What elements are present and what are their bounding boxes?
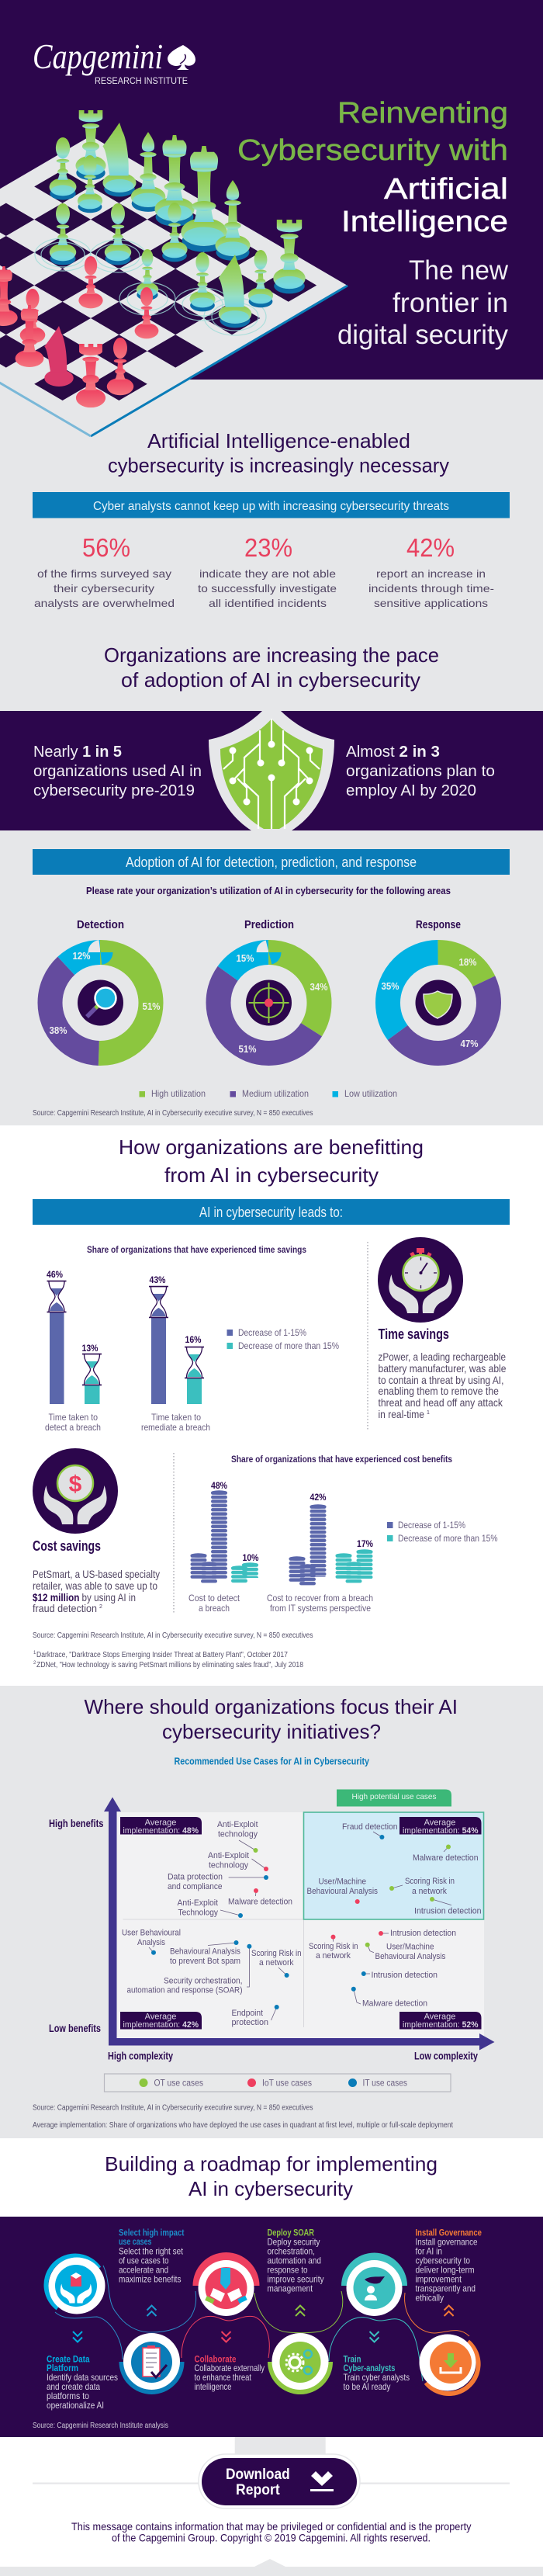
heading: pace of adoption: Organizations are increasing the pace — [104, 643, 439, 667]
source and note: Source: Capgemini Research Institute, AI in Cybersecurity executive survey, N = 850 executives — [33, 2103, 313, 2113]
text: collaborate: intelligence — [194, 2381, 232, 2392]
title: frontier in — [393, 288, 508, 318]
text: collaborate: to enhance threat — [194, 2372, 252, 2383]
tag: high potential use cases — [337, 1790, 451, 1807]
source and footnotes: Darktrace, "Darktrace Stops Emerging Insider Threat at Battery Plant", October 2017 — [36, 1651, 288, 1659]
legend: use cases: OT use cases — [154, 2077, 203, 2088]
text: create data platform — [47, 2353, 118, 2411]
axis: benefits — [104, 1798, 121, 2046]
donut: response: 18% — [459, 956, 477, 968]
source: Source: Capgemini Research Institute analysis — [33, 2422, 168, 2430]
source and footnotes — [33, 1631, 313, 1669]
stat: 42%: sensitive applications — [374, 597, 488, 609]
point labels: Endpoint — [231, 2009, 263, 2018]
donut: response: 35% — [382, 980, 399, 992]
text: create data platform: platforms to — [47, 2391, 89, 2401]
point labels: Analysis — [137, 1938, 165, 1947]
chart: cost savings: 42% — [310, 1492, 327, 1503]
case study: cost savings: 2 — [99, 1604, 102, 1610]
green chess pieces, back rows — [50, 110, 306, 311]
button: download report — [199, 2454, 360, 2508]
point labels: and compliance — [168, 1882, 222, 1891]
chart: time savings — [45, 1244, 339, 1433]
text: install governance: improvement — [416, 2274, 462, 2285]
blue bar: leads to — [33, 1199, 510, 1225]
chart: cost savings: Cost to detect — [188, 1593, 240, 1603]
donut: response: Response — [416, 918, 461, 931]
axis labels: Low benefits — [49, 2023, 101, 2034]
point labels: Malware detection — [228, 1897, 292, 1906]
heading: benefitting — [119, 1135, 424, 1187]
point labels: Scoring Risk in — [405, 1877, 455, 1886]
source and note — [33, 2103, 453, 2130]
text: select high impact use cases — [119, 2228, 185, 2285]
text: deploy soar: Deploy SOAR — [267, 2228, 314, 2238]
donut: prediction — [219, 918, 328, 1055]
text: 1 in 5: cybersecurity pre-2019 — [33, 782, 195, 799]
text: 2 in 3: Almost 2 in 3 — [346, 744, 440, 761]
point labels: Technology — [178, 1908, 218, 1917]
text: create data platform: Create Data — [47, 2353, 90, 2364]
text: create data platform: Platform — [47, 2363, 78, 2373]
step: install governance icon — [407, 2322, 490, 2406]
text: train cyber-analysts: Train cyber analysts — [343, 2372, 410, 2383]
donut: detection: 38% — [50, 1025, 67, 1036]
heading: increasingly necessary: cybersecurity is increasingly necessary — [108, 453, 449, 477]
stat: 56%: their cybersecurity — [54, 582, 154, 595]
text: deploy soar: automation and — [267, 2255, 321, 2266]
case study: cost savings: retailer, was able to save up to — [33, 1579, 157, 1592]
panel: footer — [0, 2437, 543, 2567]
point labels: Security orchestration, — [164, 1976, 242, 1985]
donut: prediction: 34% — [310, 981, 328, 993]
panel: roadmap heading: AI in cybersecurity — [188, 2177, 353, 2200]
step: deploy soar icon — [268, 2333, 333, 2394]
text: 1 in 5 — [33, 744, 202, 799]
point labels: technology — [209, 1861, 248, 1870]
text: deploy soar: response to — [267, 2265, 308, 2276]
point labels: Anti-Exploit — [177, 1898, 218, 1908]
blue bar: cyber analysts: Cyber analysts cannot keep up with increasing cybersecurity threats — [93, 500, 449, 513]
data points: red IoT — [254, 1867, 383, 1940]
point labels: technology — [218, 1830, 258, 1839]
legend: use cases: IoT use cases — [262, 2077, 312, 2088]
text: select high impact use cases: of use cases to — [119, 2255, 169, 2266]
point labels: User/Machine — [386, 1942, 434, 1951]
blue bar: leads to: AI in cybersecurity leads to: — [199, 1205, 343, 1220]
data points: blue IT — [151, 1835, 384, 2009]
point labels: Fraud detection — [342, 1822, 397, 1832]
panel: roadmap heading: Building a roadmap for implementing — [105, 2152, 438, 2176]
blue bar: adoption — [33, 849, 510, 875]
badge: 52%: Average — [424, 2012, 455, 2021]
badge: 48%: implementation: 48% — [123, 1826, 199, 1836]
point labels: Intrusion detection — [371, 1971, 438, 1980]
text: collaborate — [194, 2353, 265, 2392]
text: select high impact use cases: maximize benefits — [119, 2274, 182, 2285]
point labels: Data protection — [168, 1872, 223, 1881]
text: train cyber-analysts: Train — [343, 2353, 361, 2364]
axis labels — [49, 1818, 478, 2061]
stat: 42%: 42% — [406, 533, 455, 562]
source and footnotes: 1 — [33, 1651, 36, 1656]
text: train cyber-analysts: to be AI ready — [343, 2381, 391, 2392]
heading: benefitting: How organizations are benefitting — [119, 1135, 424, 1159]
stat: 56%: of the firms surveyed say — [37, 567, 171, 580]
icon: magnifier — [87, 987, 116, 1017]
heading: pace of adoption: of adoption of AI in cybersecurity — [121, 668, 420, 692]
text: 1 in 5: Nearly 1 in 5 — [33, 744, 122, 761]
case study: cost savings: $12 million by using AI in — [33, 1591, 136, 1603]
chart: time savings: 43% — [149, 1274, 166, 1285]
heading: benefitting: from AI in cybersecurity — [164, 1163, 379, 1187]
point labels: User/Machine — [318, 1877, 366, 1886]
chart: cost savings: 10% — [242, 1552, 259, 1563]
axis labels: High complexity — [108, 2051, 173, 2061]
badge: 52%: implementation: 52% — [403, 2020, 479, 2030]
tag: high potential use cases: High potential use cases — [352, 1792, 436, 1801]
text: install governance: Install Governance — [416, 2228, 482, 2238]
text: deploy soar: management — [267, 2283, 313, 2294]
case study: time savings: zPower, a leading rechargeable — [379, 1350, 506, 1363]
heading: where to focus: cybersecurity initiatives? — [162, 1720, 381, 1743]
text: train cyber-analysts — [343, 2353, 410, 2392]
badge: 54% — [399, 1817, 481, 1836]
icon: circuit shield — [209, 711, 334, 830]
point labels: Malware detection — [413, 1853, 478, 1863]
icon: target — [248, 983, 289, 1023]
quadrant: high potential — [304, 1812, 484, 1919]
chart: time savings: Decrease of 1-15% — [238, 1327, 306, 1338]
case study: time savings — [379, 1326, 507, 1420]
logo: Capgemini — [33, 36, 163, 76]
source: Source: Capgemini Research Institute, AI in Cybersecurity executive survey, N = 850 executives — [33, 1109, 313, 1118]
text: install governance: transparently and — [416, 2283, 476, 2294]
badge: 54%: implementation: 54% — [403, 1826, 479, 1836]
panel: utilization donuts — [0, 830, 543, 1125]
title: digital security — [337, 320, 508, 350]
point labels: Anti-Exploit — [208, 1851, 249, 1860]
text: deploy soar: Deploy security — [267, 2237, 320, 2248]
stat: 42%: incidents through time- — [368, 582, 494, 595]
panel: benefits — [0, 1125, 543, 1686]
text: create data platform: operationalize AI — [47, 2400, 104, 2411]
stat: 23%: to successfully investigate — [198, 582, 337, 595]
legend: utilization: Low utilization — [344, 1088, 397, 1099]
chart: cost savings: Cost to recover from a breach — [267, 1593, 373, 1603]
point labels: Scoring Risk in — [251, 1949, 301, 1958]
point labels: Behavioural Analysis — [307, 1887, 378, 1896]
donut: detection: 12% — [73, 950, 91, 962]
point labels — [122, 1820, 481, 2027]
heading: pace of adoption — [104, 643, 439, 692]
heading: increasingly necessary — [108, 429, 449, 477]
stat: 23%: 23% — [244, 533, 292, 562]
logo: RESEARCH INSTITUTE — [95, 77, 188, 86]
badge: 48%: Average — [145, 1818, 176, 1827]
icon: download arrow — [310, 2471, 334, 2491]
chart: time savings: 13% — [82, 1343, 99, 1354]
text: 2 in 3 — [346, 744, 495, 799]
copyright note: This message contains information that may be privileged or confidential and is the property — [71, 2520, 472, 2533]
chessboard — [0, 136, 348, 436]
coin stacks: detect a breach — [191, 1490, 258, 1583]
heading: where to focus: Where should organizations focus their AI — [84, 1695, 458, 1718]
point labels: protection — [231, 2018, 268, 2027]
text: create data platform: and create data — [47, 2381, 100, 2392]
point labels: Behavioural Analysis — [170, 1947, 240, 1956]
chart question: Please rate your organization’s utilization of AI in cybersecurity for the following areas — [86, 885, 451, 896]
chart: cost savings: a breach — [199, 1603, 230, 1614]
case study: time savings: in real-time — [379, 1408, 424, 1420]
axis labels: Low complexity — [414, 2051, 478, 2061]
ripples on board — [35, 238, 266, 335]
stat: 23%: all identified incidents — [209, 597, 327, 609]
heading: increasingly necessary: Artificial Intelligence-enabled — [147, 429, 410, 452]
point labels: a network — [259, 1958, 294, 1968]
stat: 23% — [198, 533, 337, 609]
panel: roadmap heading — [0, 2138, 543, 2217]
leader lines — [149, 1832, 451, 2020]
blue bar: adoption: Adoption of AI for detection, prediction, and response — [126, 855, 417, 870]
text: install governance: deliver long-term — [416, 2265, 475, 2276]
donut: response: 47% — [461, 1038, 479, 1049]
step: collaborate icon — [192, 2252, 259, 2316]
donut: detection — [50, 918, 161, 1053]
case study: time savings: battery manufacturer, was able — [379, 1362, 507, 1375]
chart: time savings: Time taken to — [48, 1412, 98, 1423]
point labels: Malware detection — [362, 1999, 427, 2009]
chart: time savings: remediate a breach — [141, 1422, 210, 1433]
source and footnotes: 2 — [33, 1661, 36, 1666]
point labels: Anti-Exploit — [217, 1820, 258, 1829]
text: select high impact use cases: use cases — [119, 2236, 152, 2247]
legend: utilization: Medium utilization — [242, 1088, 309, 1099]
badge: 42%: implementation: 42% — [123, 2020, 199, 2030]
chart: time savings: 16% — [185, 1334, 202, 1345]
case study: cost savings: PetSmart, a US-based specialty — [33, 1568, 160, 1580]
step: select use cases icon — [119, 2333, 185, 2394]
wave connectors — [55, 2266, 469, 2381]
badge: 54%: Average — [424, 1818, 455, 1827]
donut: detection: Detection — [77, 918, 124, 931]
title: Reinventing — [337, 97, 508, 130]
point labels: Intrusion detection — [390, 1929, 456, 1938]
donut: prediction: 15% — [236, 952, 254, 964]
icon: stopwatch in hands — [378, 1237, 463, 1323]
chart: cost savings: Decrease of 1-15% — [398, 1520, 465, 1531]
chart title: Recommended Use Cases for AI in Cybersecurity — [174, 1756, 370, 1766]
copyright note: of the Capgemini Group. Copyright © 2019 Capgemini. All rights reserved. — [112, 2532, 431, 2544]
legend: utilization — [140, 1088, 397, 1099]
text: train cyber-analysts: Cyber-analysts — [343, 2363, 396, 2373]
blue bar: cyber analysts — [33, 492, 510, 518]
copyright note — [71, 2520, 472, 2544]
donut: detection: 51% — [143, 1000, 161, 1012]
text: install governance: cybersecurity to — [416, 2255, 470, 2266]
axis: complexity — [109, 2033, 495, 2051]
text: select high impact use cases: Select the right set — [119, 2246, 184, 2257]
case study: time savings: Time savings — [379, 1326, 449, 1342]
matrix chart — [49, 1790, 495, 2061]
stat: 42%: report an increase in — [376, 567, 486, 580]
text: select high impact use cases: Select high impact — [119, 2228, 185, 2238]
title: Cybersecurity with — [237, 134, 508, 167]
case study: time savings: to contain a threat by using AI, — [379, 1374, 504, 1386]
chart: cost savings: 48% — [211, 1480, 227, 1491]
title: The new — [409, 255, 509, 286]
point labels: User Behavioural — [122, 1928, 181, 1937]
stat: 23%: indicate they are not able — [199, 567, 336, 580]
button: download report: Download — [226, 2467, 290, 2483]
text: install governance — [416, 2228, 482, 2304]
coin stacks: recover from a breach — [289, 1504, 372, 1586]
text: deploy soar: orchestration, — [267, 2246, 315, 2257]
text: create data platform: Identify data sources — [47, 2372, 118, 2383]
chart: time savings: 46% — [47, 1269, 63, 1280]
text: collaborate: Collaborate externally — [194, 2363, 265, 2373]
title — [237, 97, 509, 350]
stat: 56% — [34, 533, 175, 609]
case study: time savings: 1 — [427, 1410, 430, 1416]
badge: 52% — [399, 2012, 481, 2030]
case study: cost savings: Cost savings — [33, 1538, 101, 1554]
title: Intelligence — [341, 206, 508, 238]
icon: dollar in hands: $ — [69, 1472, 82, 1497]
donut: prediction: Prediction — [244, 918, 294, 931]
text: collaborate: Collaborate — [194, 2353, 237, 2364]
stat: 56%: 56% — [82, 533, 130, 562]
chart: cost savings: 17% — [357, 1538, 373, 1549]
text: 2 in 3: organizations plan to — [346, 763, 495, 780]
donut: response — [382, 918, 489, 1053]
point labels: Scoring Risk in — [309, 1942, 358, 1951]
case study: cost savings: fraud detection — [33, 1602, 97, 1614]
legend: use cases — [104, 2074, 451, 2092]
text: 2 in 3: employ AI by 2020 — [346, 782, 476, 799]
panel: hero — [0, 0, 543, 711]
icon: small shield — [424, 991, 452, 1018]
point labels: Behavioural Analysis — [375, 1952, 446, 1961]
source and footnotes: ZDNet, "How technology is saving PetSmart millions by eliminating sales fraud", July 2018 — [36, 1661, 303, 1669]
axis labels: High benefits — [49, 1818, 104, 1829]
text: deploy soar — [267, 2228, 324, 2294]
source and note: Average implementation: Share of organizations who have deployed the use cases in quadrant at first level, multiple or full-scale deployment — [33, 2121, 453, 2130]
source and footnotes: Source: Capgemini Research Institute, AI in Cybersecurity executive survey, N = 850 executives — [33, 1631, 313, 1640]
text: install governance: ethically — [416, 2293, 444, 2304]
step: create data platform icon — [34, 2244, 116, 2326]
chart: time savings: Decrease of more than 15% — [238, 1340, 339, 1351]
chart: cost savings — [188, 1454, 498, 1614]
donut: prediction: 51% — [239, 1043, 257, 1055]
chevrons — [73, 2305, 454, 2342]
stat: 42% — [368, 533, 494, 609]
step: train cyber-analysts icon — [341, 2253, 407, 2316]
text: install governance: for AI in — [416, 2246, 442, 2257]
panel: roadmap — [0, 2217, 543, 2437]
chart: time savings: Share of organizations that have experienced time savings — [87, 1244, 306, 1255]
title: Artificial — [384, 173, 508, 206]
data points: green OT — [253, 1844, 451, 1947]
point labels: to prevent Bot spam — [170, 1957, 240, 1966]
legend: use cases: IT use cases — [363, 2077, 407, 2088]
case study: time savings: threat and head off any attack — [379, 1396, 503, 1409]
chart: time savings: detect a breach — [45, 1422, 101, 1433]
icon: dollar in hands — [33, 1448, 118, 1534]
chart: cost savings: Share of organizations that have experienced cost benefits — [231, 1454, 452, 1465]
heading: where to focus — [84, 1695, 458, 1743]
text: install governance: Install governance — [416, 2237, 478, 2248]
red chess pieces — [0, 255, 251, 407]
point labels: automation and response (SOAR) — [127, 1985, 242, 1995]
chart: cost savings: Decrease of more than 15% — [398, 1533, 498, 1544]
text: select high impact use cases: accelerate and — [119, 2265, 168, 2276]
case study: cost savings — [33, 1538, 160, 1614]
panel: use case matrix — [0, 1686, 543, 2138]
point labels: Intrusion detection — [414, 1906, 481, 1916]
point labels: a network — [316, 1951, 351, 1961]
panel: adoption band — [0, 711, 543, 830]
badge: 42% — [120, 2012, 202, 2030]
text: deploy soar: improve security — [267, 2274, 324, 2285]
chart: cost savings: from IT systems perspective — [270, 1603, 371, 1614]
text: 1 in 5: organizations used AI in — [33, 763, 202, 780]
button: download report: Report — [236, 2482, 280, 2498]
chart: time savings: Time taken to — [151, 1412, 201, 1423]
stat: 56%: analysts are overwhelmed — [34, 597, 175, 609]
case study: time savings: enabling them to remove the — [379, 1385, 499, 1397]
badge: 42%: Average — [145, 2012, 176, 2021]
legend: utilization: High utilization — [151, 1088, 206, 1099]
badge: 48% — [120, 1817, 202, 1836]
point labels: a network — [412, 1887, 447, 1896]
footer strip — [0, 2559, 543, 2576]
